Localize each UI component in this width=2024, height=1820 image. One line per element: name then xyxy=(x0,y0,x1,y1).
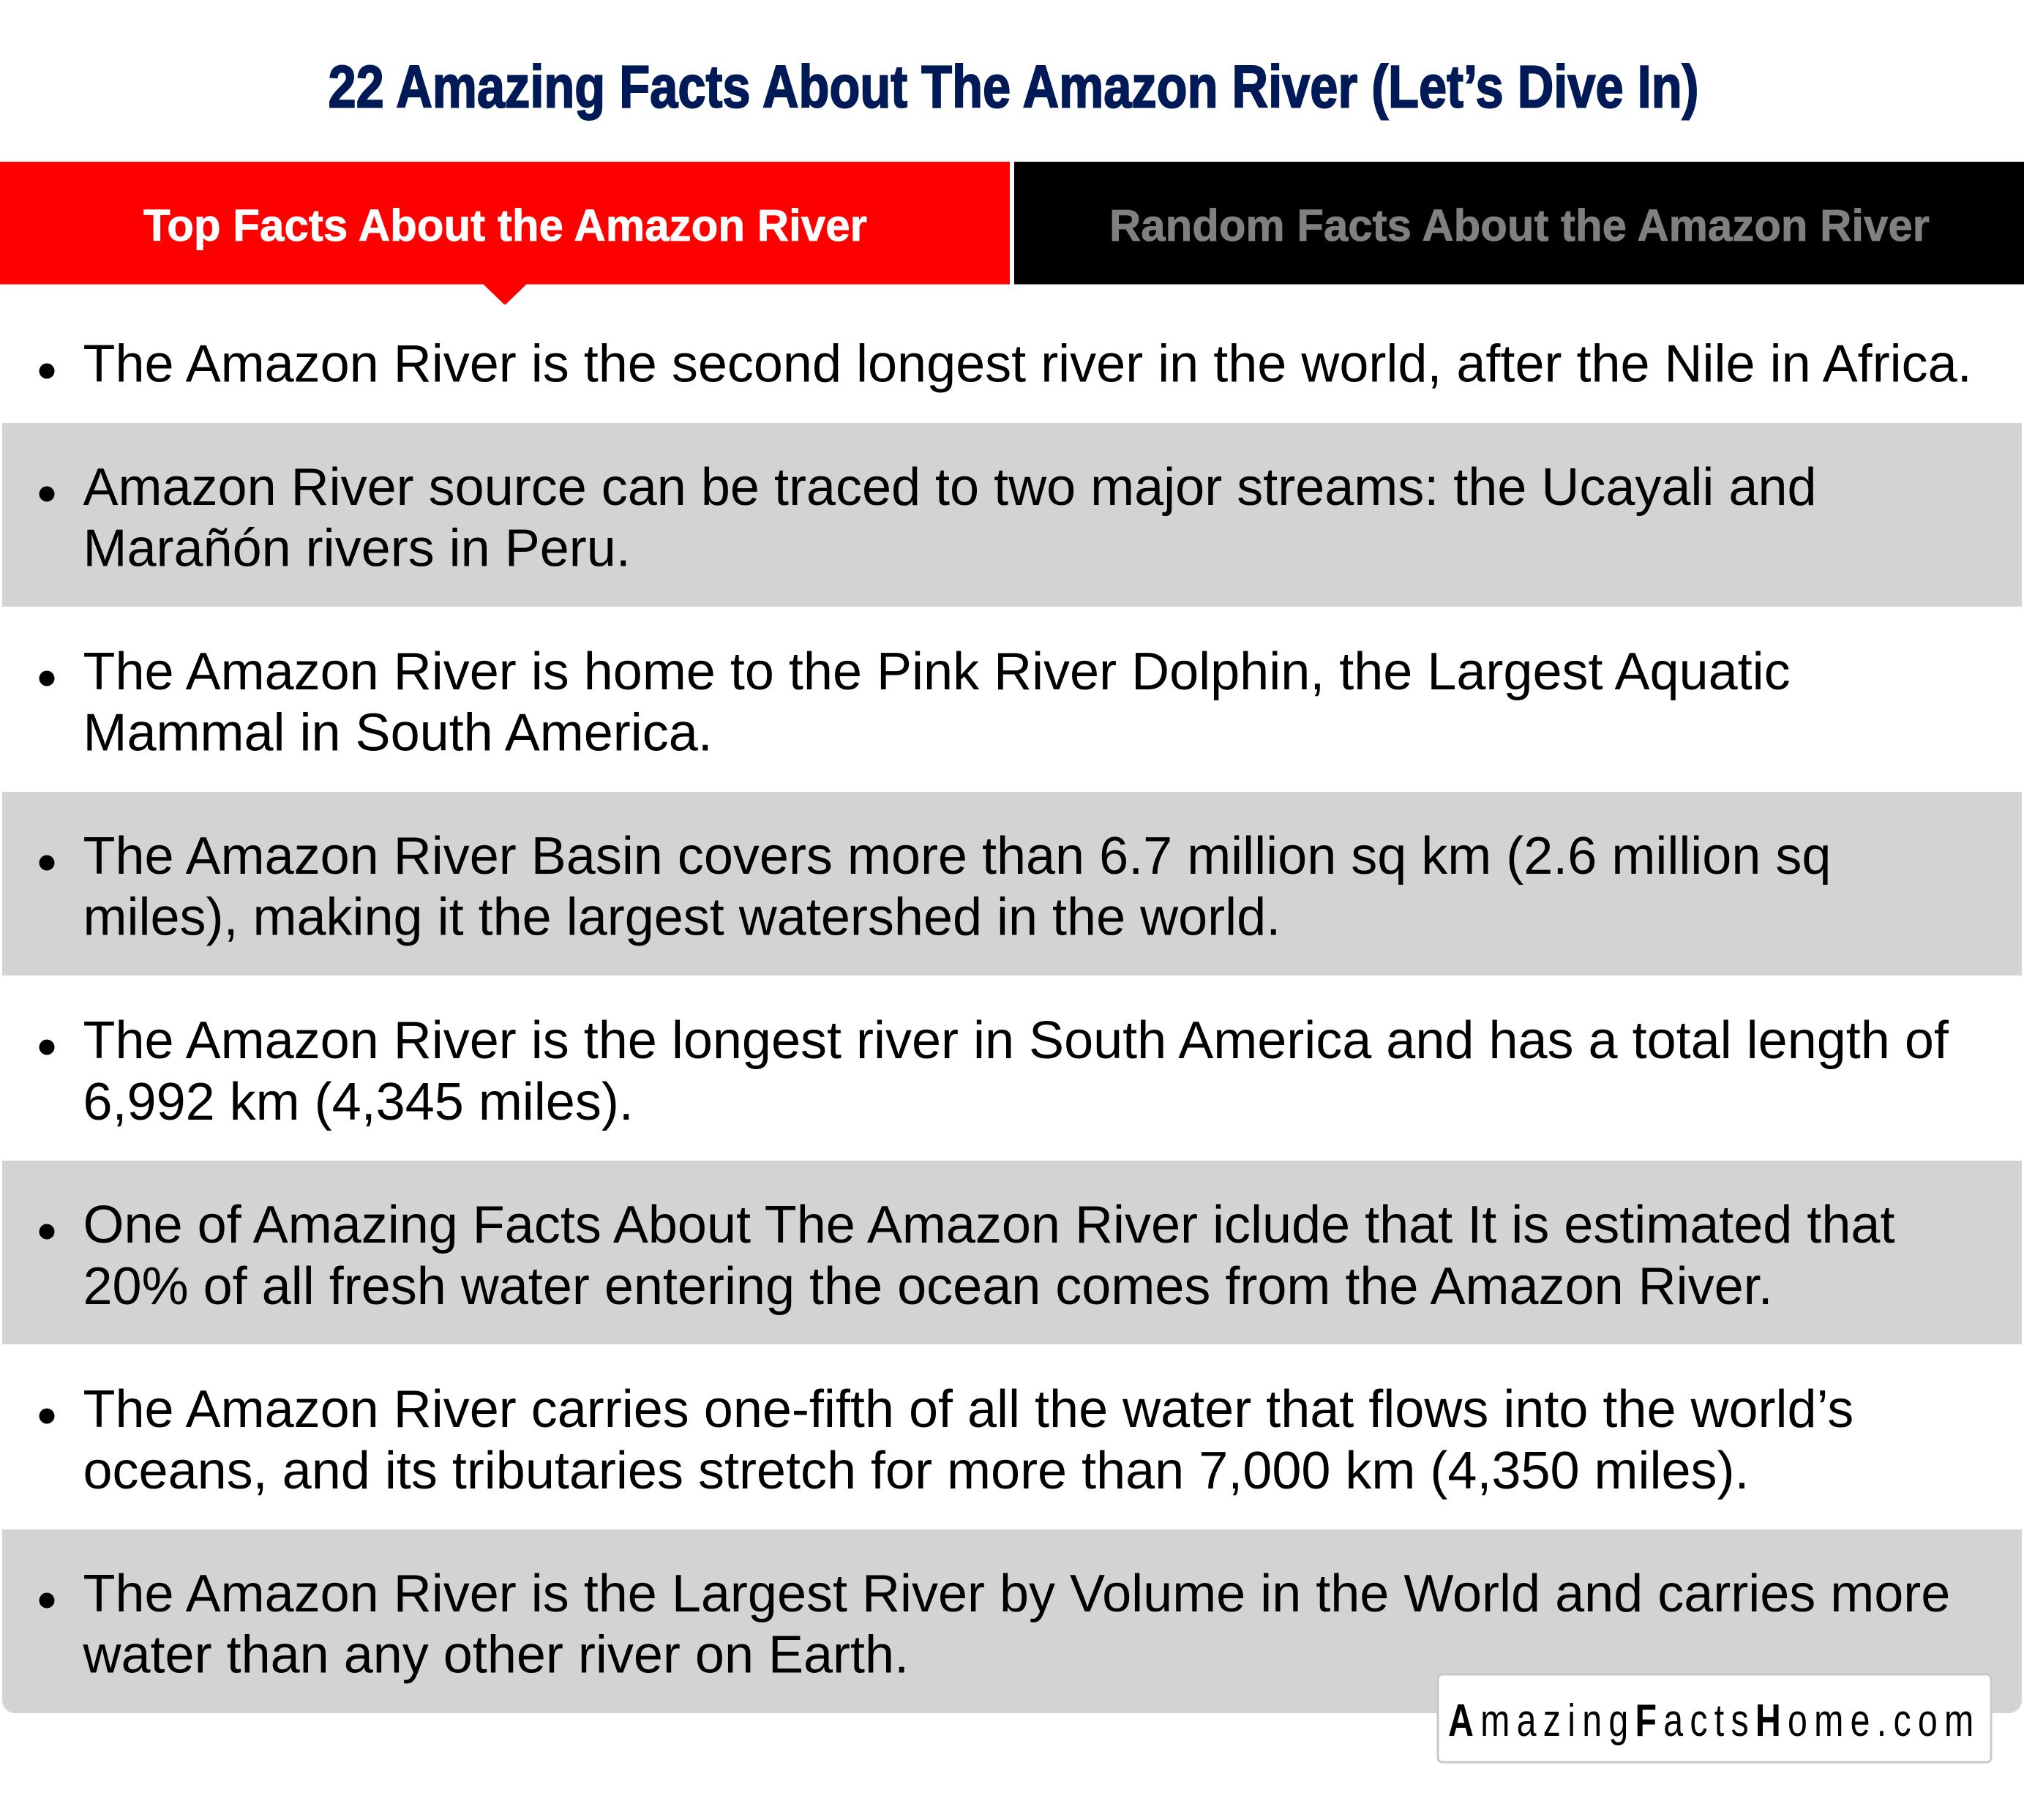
fact 2 panel xyxy=(2,423,2022,607)
fact 6 panel: 20% of all fresh water entering the ocean comes from the Amazon River. xyxy=(83,1257,1773,1316)
fact 6 panel: One of Amazing Facts About The Amazon River iclude that It is estimated that xyxy=(83,1196,1894,1254)
fact 5 xyxy=(40,1011,1949,1131)
title: 22 Amazing Facts About The Amazon River (Let’s Dive In) xyxy=(328,54,1699,120)
fact 3: The Amazon River is home to the Pink River Dolphin, the Largest Aquatic xyxy=(83,643,1791,701)
tab: random facts (inactive): Random Facts About the Amazon River xyxy=(1109,201,1930,250)
fact 8 panel: water than any other river on Earth. xyxy=(82,1626,909,1685)
fact 5: 6,992 km (4,345 miles). xyxy=(83,1073,634,1131)
fact 4 panel xyxy=(2,792,2022,975)
watermark: AmazingFactsHome.com xyxy=(1438,1674,1991,1762)
fact 8 panel xyxy=(2,1529,2022,1713)
fact 4 panel: The Amazon River Basin covers more than 6.7 million sq km (2.6 million sq xyxy=(83,827,1831,885)
fact 7: oceans, and its tributaries stretch for more than 7,000 km (4,350 miles). xyxy=(83,1442,1750,1500)
watermark: AmazingFactsHome.com: AmazingFactsHome.com xyxy=(1448,1695,1981,1745)
tab: top facts (active) xyxy=(0,162,1010,304)
fact 2 panel: Amazon River source can be traced to two major streams: the Ucayali and xyxy=(83,458,1817,517)
fact 2 panel: Marañón rivers in Peru. xyxy=(83,520,631,578)
fact 5: The Amazon River is the longest river in South America and has a total length of xyxy=(83,1011,1949,1070)
fact 7 xyxy=(40,1380,1854,1500)
tab: top facts (active): Top Facts About the Amazon River xyxy=(143,201,867,250)
fact 1: The Amazon River is the second longest river in the world, after the Nile in Africa. xyxy=(83,335,1972,394)
fact 7: The Amazon River carries one-fifth of all the water that flows into the world’s xyxy=(83,1380,1854,1439)
fact 3 xyxy=(40,643,1791,763)
fact 8 panel: The Amazon River is the Largest River by Volume in the World and carries more xyxy=(83,1565,1950,1623)
fact 4 panel: miles), making it the largest watershed in the world. xyxy=(83,888,1281,947)
fact 3: Mammal in South America. xyxy=(83,704,713,763)
fact 6 panel xyxy=(2,1161,2022,1344)
tab: random facts (inactive) xyxy=(1014,162,2024,284)
